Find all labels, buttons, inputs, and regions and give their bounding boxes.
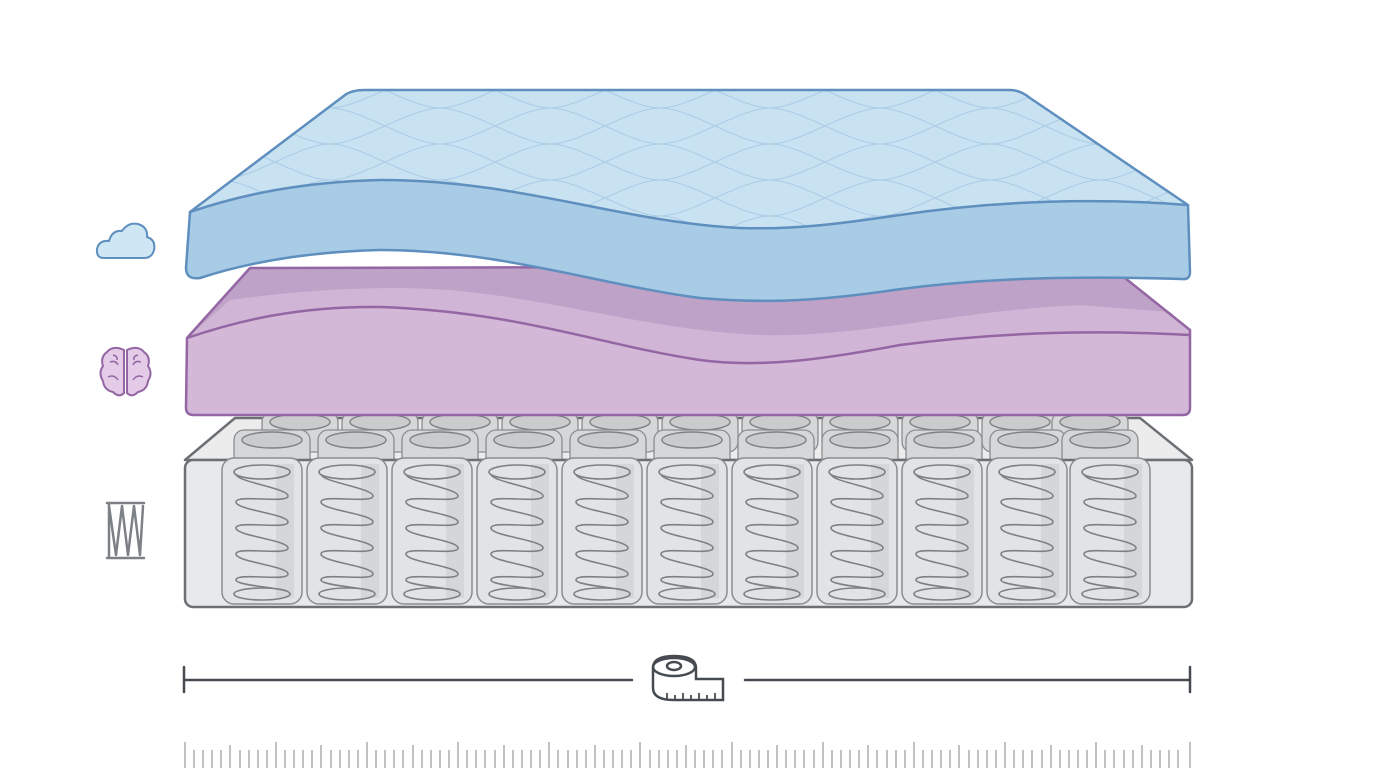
back row coils: [234, 412, 1138, 470]
memory foam layer: [186, 266, 1190, 415]
icon: cloud: [97, 224, 154, 258]
icon: tape measure: [653, 656, 723, 700]
top cooling layer: [186, 90, 1190, 301]
ruler: [185, 742, 1190, 768]
icon: spring: [107, 503, 144, 558]
spring layer: [185, 412, 1192, 607]
dimension line: [184, 667, 1190, 692]
front row pocket springs: [222, 458, 1150, 604]
icon: brain: [100, 348, 150, 395]
